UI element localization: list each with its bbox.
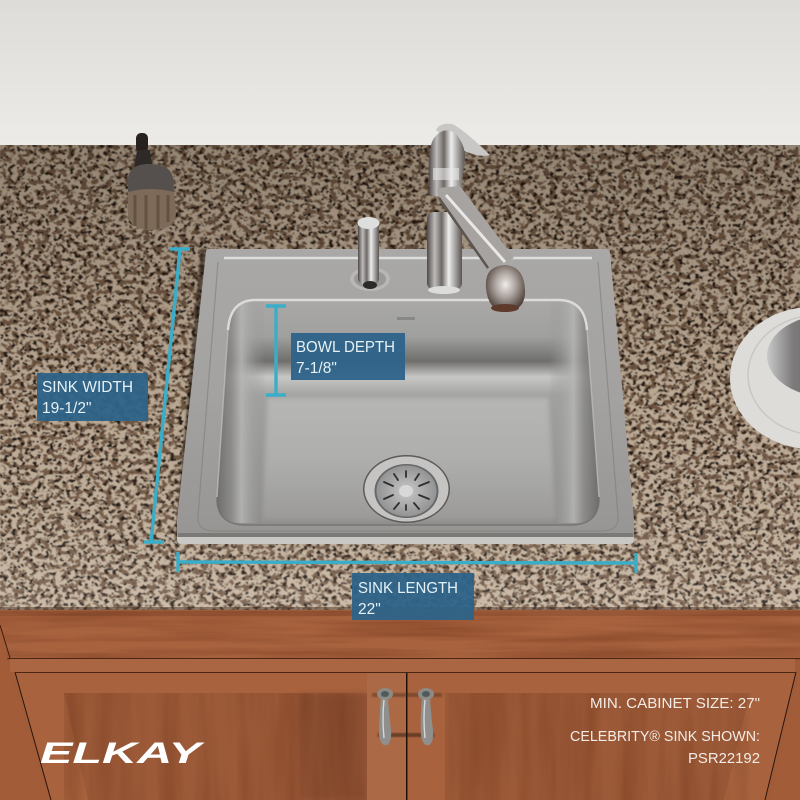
wood cabinet (0, 610, 800, 800)
sink shadow (175, 248, 206, 540)
label: bowl depth: BOWL DEPTH (296, 339, 395, 356)
sink width line (144, 249, 190, 543)
deck bead (224, 257, 592, 259)
label: sink width (37, 373, 148, 421)
faucet base body (427, 212, 462, 290)
ridge highlight (250, 387, 566, 393)
bowl side walls (217, 301, 266, 523)
sink deck (177, 249, 634, 544)
cabinet handles (372, 688, 442, 745)
label: sink length: SINK LENGTH (358, 580, 458, 597)
left door (15, 672, 406, 800)
sink length line (178, 552, 636, 573)
cabinet size note: MIN. CABINET SIZE: 27" (590, 695, 760, 712)
pull-out spout (437, 186, 514, 270)
model note: CELEBRITY® SINK SHOWN: (570, 728, 760, 745)
bowl basin (217, 301, 599, 524)
drain strainer (363, 455, 450, 523)
model note (570, 728, 760, 767)
wall background (0, 0, 800, 146)
bowl floor (262, 398, 556, 520)
top rail (0, 611, 800, 672)
dimension lines (144, 249, 636, 573)
plate and bowl (730, 307, 800, 449)
stainless steel sink (175, 248, 634, 544)
label: sink length (352, 573, 474, 620)
soap pump (350, 217, 390, 291)
label: bowl depth (291, 333, 405, 380)
right door (408, 672, 796, 800)
faucet head (429, 130, 465, 198)
granite countertop (0, 145, 800, 611)
label: sink width: SINK WIDTH (42, 379, 133, 396)
faucet lever (436, 124, 490, 156)
model note: PSR22192 (688, 750, 760, 767)
label: bowl depth: 7-1/8" (296, 360, 337, 377)
faucet (427, 124, 525, 312)
Elkay logo: ELKAY (40, 737, 206, 770)
label: sink length: 22" (358, 601, 381, 618)
spout head (486, 265, 525, 312)
front lip (177, 537, 634, 544)
bowl rim highlight (228, 300, 587, 330)
label: sink width: 19-1/2" (42, 400, 91, 417)
bowl depth line (266, 306, 286, 395)
side stiles (0, 620, 800, 800)
logo stamp (397, 317, 415, 320)
soap dispenser (128, 133, 176, 230)
